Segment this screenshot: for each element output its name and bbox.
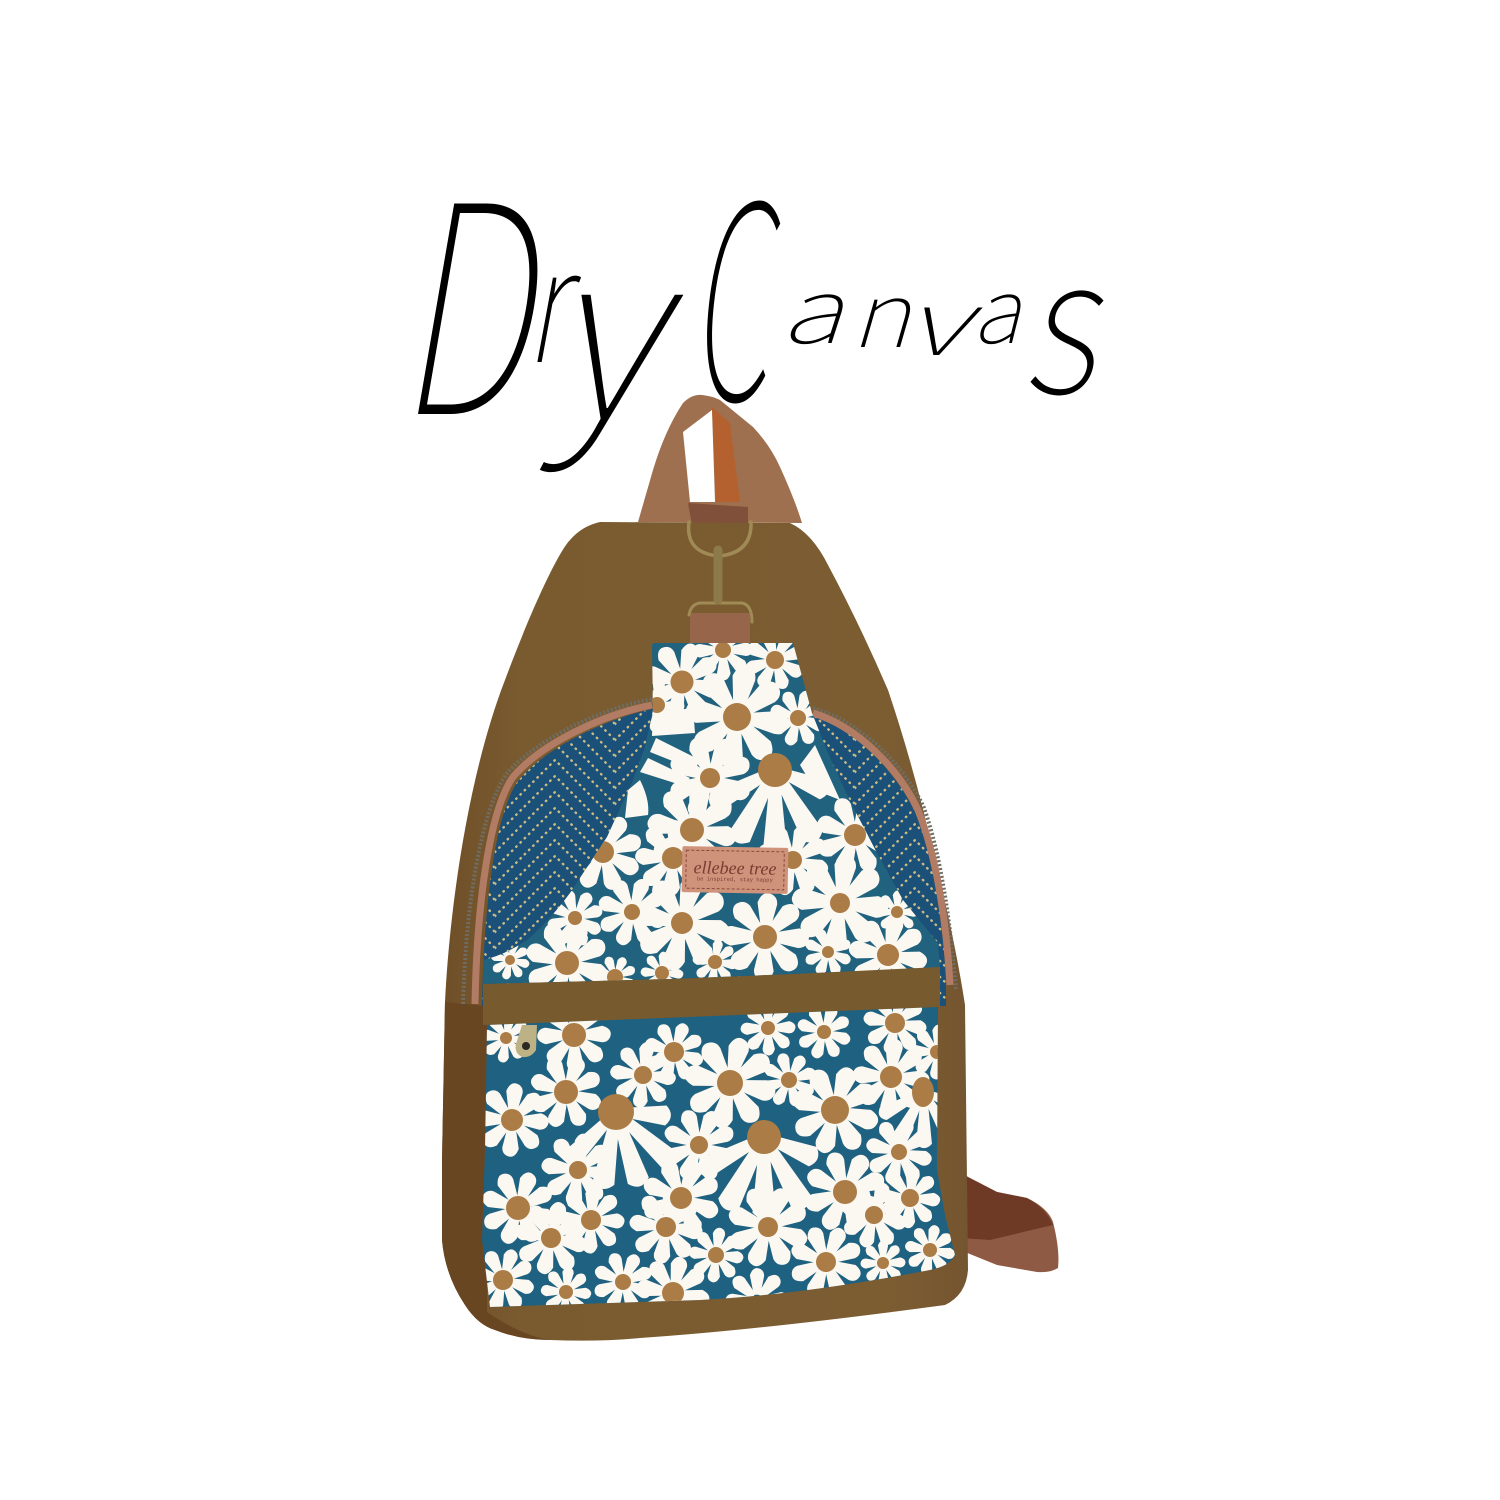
lower strap tab bbox=[690, 613, 750, 647]
backpack bbox=[442, 395, 1058, 1341]
flap panel bbox=[483, 643, 940, 984]
lower pocket fabric bbox=[482, 1007, 955, 1307]
cream petal bars bbox=[625, 708, 840, 818]
top handle bbox=[638, 395, 802, 525]
shoulder strap loop bbox=[960, 1172, 1058, 1272]
title: r bbox=[525, 177, 582, 409]
brown band bbox=[483, 967, 940, 1025]
lower left side panel bbox=[442, 1002, 550, 1340]
leather brand label: ellebee tree bbox=[693, 857, 777, 879]
pocket trim bbox=[475, 705, 950, 1004]
title: y bbox=[539, 150, 683, 483]
title: D bbox=[396, 78, 546, 498]
title: n bbox=[850, 243, 913, 373]
canvas body bbox=[442, 522, 968, 1341]
title: C bbox=[690, 87, 781, 478]
leather brand label: be inspired, stay happy bbox=[697, 875, 774, 884]
title: v bbox=[905, 251, 983, 381]
infographic canvas bbox=[418, 200, 1104, 1341]
leather brand label bbox=[682, 846, 788, 894]
title: s bbox=[1022, 173, 1104, 448]
title: a bbox=[972, 239, 1023, 369]
zipper bbox=[463, 699, 956, 1004]
zipper pull bbox=[516, 1025, 537, 1057]
title bbox=[396, 78, 1104, 498]
hardware: D-ring and swivel hook bbox=[689, 522, 752, 622]
pocket lining with chevrons bbox=[482, 709, 946, 1006]
title: a bbox=[780, 239, 846, 369]
